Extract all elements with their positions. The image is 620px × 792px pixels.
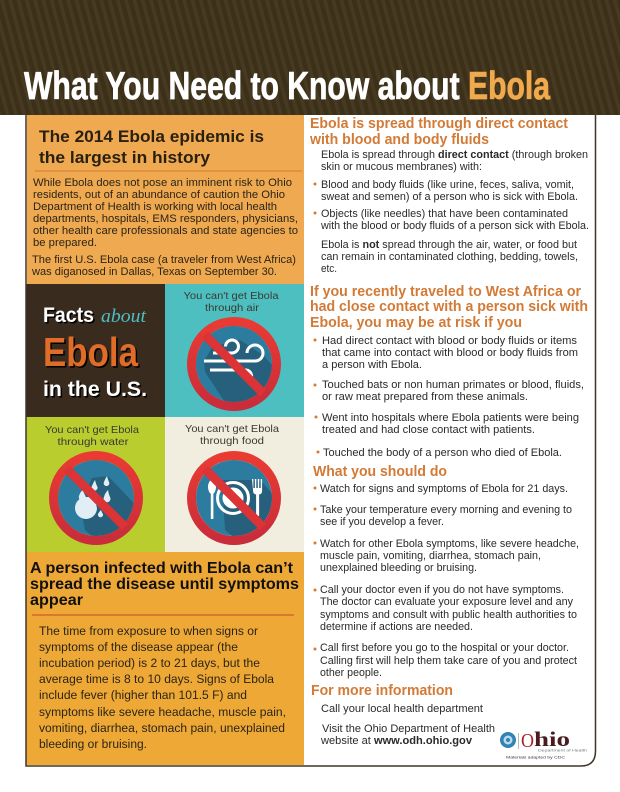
heading: more information: For more information (311, 683, 453, 699)
icon: no air (187, 317, 281, 411)
text block: spread details: Ebola is not spread through the air, water, or food but (321, 239, 577, 251)
text block: spread details: Objects (like needles) that have been contaminated (321, 208, 568, 220)
text block: spread details: etc. (321, 263, 337, 275)
text block: contact: Visit the Ohio Department of Health (322, 723, 495, 735)
text block: incubation: symptoms of the disease appear (the (39, 640, 238, 654)
text block: incubation: symptoms like severe headache, muscle pain, (39, 705, 286, 719)
heading: spread: Ebola is spread through direct contact (310, 116, 568, 132)
list: actions: Call first before you go to the hospital or your doctor. (320, 642, 569, 654)
heading: epidemic (39, 127, 264, 167)
section: for more information (311, 683, 495, 747)
facts shadow text: in the U.S. (44, 380, 148, 402)
list: risk factors: Touched bats or non human primates or blood, fluids, (322, 379, 584, 391)
section: what you should do (313, 464, 579, 679)
heading: epidemic: the largest in history (39, 148, 211, 167)
panel: no Ebola through food: through food (200, 436, 264, 447)
logo: Ohio Department of Health (500, 727, 587, 760)
logo: Ohio Department of Health: hio (534, 727, 570, 751)
list: actions (314, 483, 579, 679)
panel: no Ebola through air: You can't get Ebola (184, 291, 279, 302)
icon: state seal (500, 732, 516, 748)
panel: no Ebola through food: You can't get Ebola (185, 424, 279, 435)
text block: epidemic body: be prepared. (33, 237, 97, 249)
text block: spread details: Ebola is spread through direct contact (through broken (321, 149, 588, 161)
logo: Ohio Department of Health: O (521, 730, 534, 752)
text block: spread details: sweat and semen) of a person who is sick with Ebola. (321, 191, 578, 203)
panel: infected person callout (26, 552, 304, 765)
logo: Ohio Department of Health: Materials adapted by CDC (506, 754, 565, 760)
text block: incubation: vomiting, diarrhea, stomach pain, unexplained (39, 721, 285, 735)
list: risk factors: Went into hospitals where Ebola patients were being (322, 412, 579, 424)
list: actions: see if you develop a fever. (320, 516, 444, 528)
heading: epidemic: The 2014 Ebola epidemic is (39, 127, 264, 146)
text block: spread details: with the blood or body fluids of a person sick with Ebola. (320, 220, 589, 232)
panel: no Ebola through food (165, 417, 304, 560)
panel: Facts about Ebola in the U.S. (26, 284, 165, 417)
facts shadow text: Facts (44, 306, 96, 328)
list: risk factors: or raw meat prepared from these animals. (322, 391, 528, 403)
text block: contact (320, 703, 495, 747)
page frame (26, 115, 596, 766)
list: actions: Call your doctor even if you do not have symptoms. (320, 584, 564, 596)
list: actions: other people. (320, 667, 382, 679)
list: actions: Calling first will help them take care of you and protect (320, 655, 577, 667)
list: actions: Watch for other Ebola symptoms, like severe headche, (320, 538, 579, 550)
heading: symptoms (30, 560, 299, 609)
list: risk factors: that came into contact with blood or body fluids from (322, 347, 578, 359)
facts shadow text (44, 306, 148, 402)
list: actions: The doctor can evaluate your exposure level and any (320, 596, 574, 608)
heading: symptoms: spread the disease until symptoms (30, 576, 299, 593)
heading: symptoms: appear (30, 592, 83, 609)
title: What You Need to Know about Ebola (24, 65, 550, 108)
text block: contact: Call your local health department (321, 703, 483, 715)
list: risk factors: Touched the body of a person who died of Ebola. (323, 447, 562, 459)
heading: risk: If you recently traveled to West Africa or (310, 284, 581, 300)
list: actions: muscle pain, vomiting, diarrhea, stomach pain, (320, 550, 541, 562)
list: actions: determine if actions are needed. (320, 621, 473, 633)
heading: symptoms: A person infected with Ebola can’t (30, 560, 294, 577)
panel: Facts about Ebola in the U.S.: about (101, 306, 147, 327)
list: actions: Watch for signs and symptoms of Ebola for 21 days. (320, 483, 568, 495)
heading: spread: with blood and body fluids (309, 132, 489, 148)
heading: what to do: What you should do (313, 464, 447, 480)
panel: no Ebola through water (26, 417, 165, 560)
text block: epidemic body: residents, out of an abundance of caution the Ohio (33, 189, 285, 201)
panel: no Ebola through air: through air (205, 303, 260, 314)
header banner (0, 0, 620, 115)
text block: incubation: The time from exposure to when signs or (39, 624, 258, 638)
list: risk factors: treated and had close contact with patients. (322, 424, 535, 436)
panel: Facts about Ebola in the U.S.: Ebola (43, 329, 139, 375)
panel: Facts about Ebola in the U.S.: Facts (43, 304, 94, 327)
list: actions: symptoms and consult with public health authorities to (320, 609, 577, 621)
list: risk factors (314, 335, 584, 459)
text block: incubation: average time is 8 to 10 days. Signs of Ebola (39, 672, 274, 686)
facts shadow text: Ebola (44, 330, 141, 376)
section: at risk (310, 284, 588, 459)
heading: risk (310, 284, 588, 331)
panel: Facts about Ebola in the U.S.: in the U.S. (43, 378, 147, 401)
list: risk factors: Had direct contact with blood or body fluids or items (322, 335, 578, 347)
list: actions: Take your temperature every morning and evening to (320, 504, 572, 516)
text block: incubation (39, 624, 286, 751)
text block: epidemic body (31, 177, 298, 278)
panel: no Ebola through water: You can't get Ebola (45, 425, 139, 436)
logo: Ohio Department of Health: Department of Health (538, 748, 587, 752)
text block: epidemic body: While Ebola does not pose an imminent risk to Ohio (33, 177, 292, 189)
text block: epidemic body: Department of Health is working with local health (33, 201, 277, 213)
icon: no water (49, 451, 143, 545)
text block: spread details (314, 149, 589, 275)
text block: incubation: include fever (higher than 101.5 F) and (39, 688, 247, 702)
text block: epidemic body: departments, hospitals, EMS responders, physicians, (33, 213, 298, 225)
icon: no food (187, 451, 281, 545)
section: how Ebola spreads (309, 116, 589, 275)
text block: incubation: bleeding or bruising. (39, 737, 147, 751)
heading: risk: had close contact with a person sick with (310, 299, 588, 315)
text block: spread details: skin or mucous membranes) with: (321, 161, 482, 173)
heading: spread (309, 116, 568, 148)
text block: spread details: Blood and body fluids (like urine, feces, saliva, vomit, (321, 179, 574, 191)
list: actions: unexplained bleeding or bruising. (320, 562, 477, 574)
text block: contact: website at www.odh.ohio.gov (320, 735, 472, 747)
list: risk factors: a person with Ebola. (322, 359, 422, 371)
text block: incubation: incubation period) is 2 to 21 days, but the (39, 656, 260, 670)
heading: risk: Ebola, you may be at risk if you (310, 315, 522, 331)
panel: no Ebola through water: through water (58, 437, 129, 448)
text block: epidemic body: The first U.S. Ebola case (a traveler from West Africa) (32, 254, 296, 266)
text block: spread details: can remain in contaminated clothing, bedding, towels, (321, 251, 578, 263)
text block: epidemic body: other health care professionals and state agencies to (33, 225, 298, 237)
panel: no Ebola through air (165, 284, 304, 430)
panel: epidemic intro (27, 115, 304, 284)
text block: epidemic body: was diganosed in Dallas, Texas on September 30. (31, 266, 277, 278)
